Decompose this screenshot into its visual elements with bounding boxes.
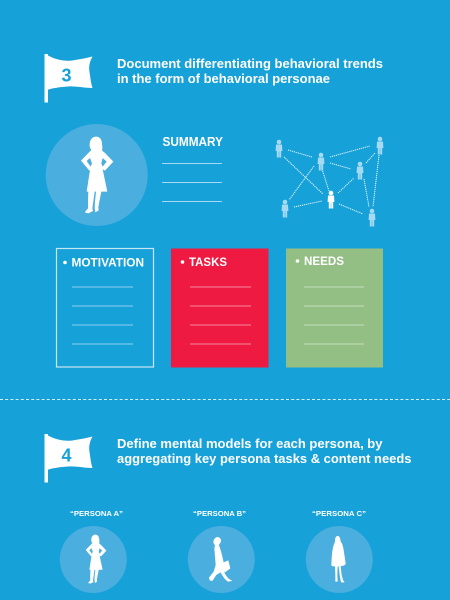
card: needs <box>286 248 383 368</box>
network diagram <box>276 137 383 226</box>
summary lines <box>162 164 222 202</box>
card: tasks <box>171 248 268 368</box>
heading step 4: aggregating key persona tasks & content needs <box>117 451 412 466</box>
persona C label: “PERSONA C” <box>312 511 366 518</box>
heading step 3 <box>117 56 383 86</box>
flag 4: 4 <box>61 446 72 466</box>
heading step 3: Document differentiating behavioral trends <box>117 56 383 71</box>
heading step 4: Define mental models for each persona, by <box>117 436 383 451</box>
icon: woman silhouette <box>81 137 113 213</box>
flag 4 <box>44 434 92 482</box>
summary heading: SUMMARY <box>162 135 224 149</box>
icon: woman hands on hips <box>86 535 106 584</box>
heading step 3: in the form of behavioral personae <box>117 71 330 86</box>
persona C <box>306 526 373 593</box>
persona A <box>60 526 127 593</box>
flag 3 <box>44 54 92 102</box>
persona B label: “PERSONA B” <box>193 511 246 518</box>
icon: standing woman in coat <box>331 536 346 582</box>
card: motivation <box>56 248 154 367</box>
flag 3: 3 <box>61 66 72 86</box>
heading step 4 <box>117 436 412 466</box>
icon: walking woman with bag <box>209 537 232 582</box>
persona B <box>188 526 255 593</box>
card: tasks: TASKS <box>189 255 227 269</box>
persona portrait <box>46 124 148 226</box>
card: motivation: MOTIVATION <box>72 256 144 270</box>
icons: network people <box>276 137 383 226</box>
card: needs: NEEDS <box>304 254 344 268</box>
persona A label: “PERSONA A” <box>70 511 123 518</box>
